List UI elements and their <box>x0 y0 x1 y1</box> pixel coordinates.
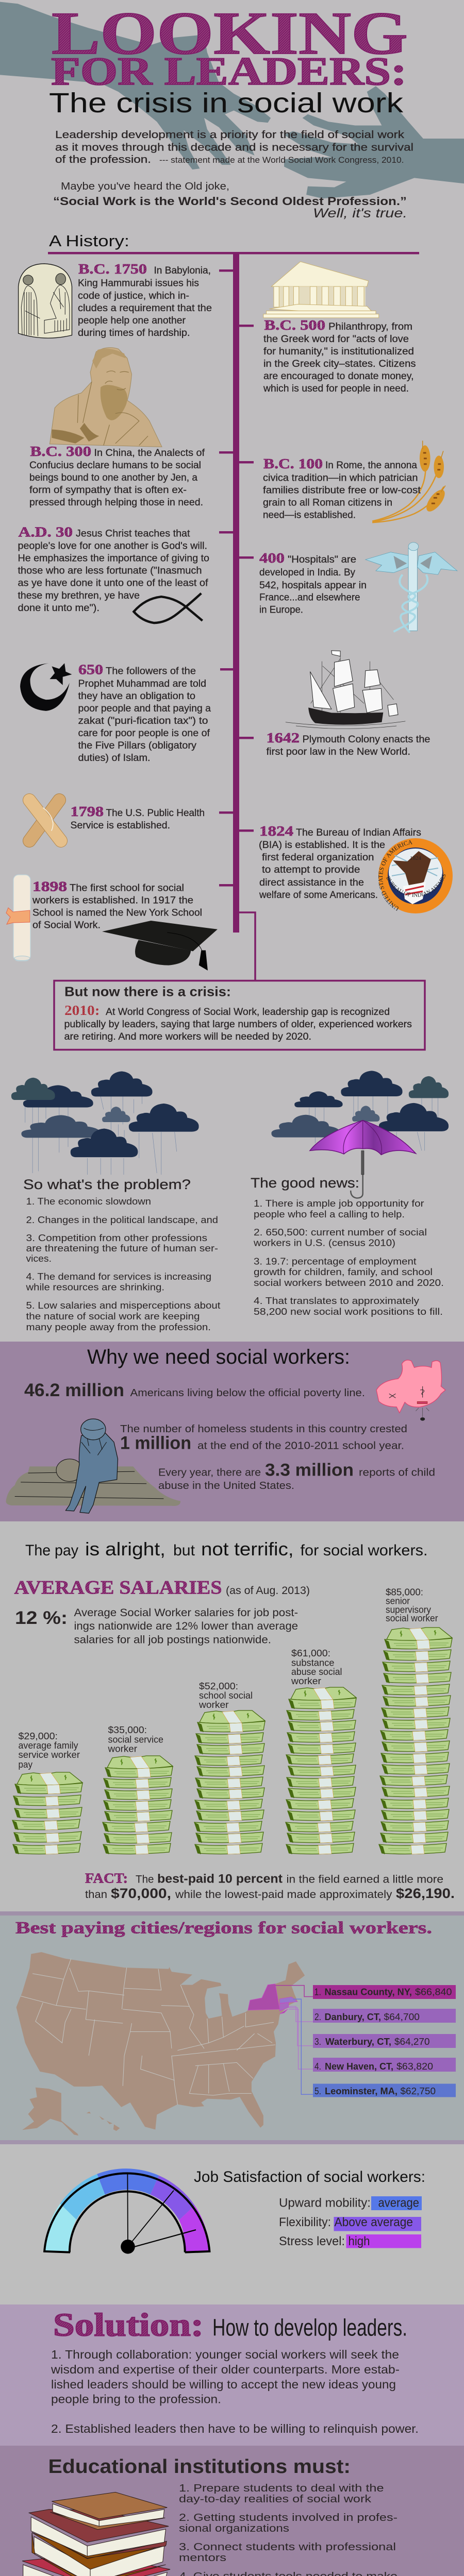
timeline entry: 650: poor people and that paying a <box>78 703 211 714</box>
timeline entry: 1824: welfare of some Americans. <box>259 890 378 901</box>
timeline entry: A.D. 30: A.D. 30 <box>19 524 73 540</box>
text: educational institutions list: 2. Getting students involved in profes- <box>179 2512 397 2523</box>
hands reaching silhouette <box>0 2 464 198</box>
stat: homeless students: at the end of the 2010-2011 school year. <box>197 1440 404 1452</box>
column: The good news: growth for children, family, and school <box>254 1267 433 1277</box>
stat: 46.2 million in poverty: 46.2 million <box>24 1380 124 1400</box>
column: So what's the problem: 4. The demand for services is increasing <box>26 1272 211 1282</box>
heading: solution <box>53 2306 407 2343</box>
timeline entry: 1798: Service is established. <box>70 820 170 831</box>
stat: homeless students: 1 million <box>120 1433 191 1453</box>
timeline entry: 650: they have an obligation to <box>78 691 195 702</box>
timeline entry: B.C. 1750: during times of hardship. <box>78 328 190 338</box>
column: So what's the problem: vices. <box>26 1253 52 1264</box>
heading: best paying cities: Best paying cities/regions for social workers. <box>15 1919 432 1937</box>
timeline entry: A.D. 30: done it unto me"). <box>18 603 100 614</box>
chart: money stack $29,000 <box>12 1772 82 1854</box>
title: The crisis in social work <box>49 88 404 118</box>
chart: salary label $61,000: $61,000: <box>291 1648 330 1658</box>
heading: pay: not terrific, <box>201 1538 294 1560</box>
text: how to develop leaders list: wisdom and expertise of their older counterparts. More estab- <box>51 2363 400 2376</box>
fact: best-paid and lowest-paid: in the field earned a little more <box>287 1873 443 1886</box>
icon: crescent and star <box>20 663 72 711</box>
timeline entry: B.C. 300 <box>29 444 205 508</box>
icon: sailing ship <box>286 651 405 728</box>
chart: salary label $61,000: abuse social <box>291 1667 342 1677</box>
timeline entry: 650 <box>78 662 211 764</box>
legend: flexibility: Flexibility: <box>279 2215 331 2229</box>
timeline entry: 1824: to attempt to provide <box>262 865 360 875</box>
callout: Waterbury: 3. <box>314 2037 321 2047</box>
heading: pay: is alright, <box>85 1538 165 1560</box>
stat: child abuse reports: Every year, there are <box>158 1467 261 1479</box>
timeline entry: 650: the Five Pillars (obligatory <box>78 740 197 751</box>
stat: child abuse reports: 3.3 million <box>265 1460 354 1480</box>
chart: salary label $85,000: $85,000: <box>386 1587 423 1597</box>
column: The good news: people who feel a calling to help. <box>254 1209 405 1219</box>
umbrella handle hook <box>351 1175 363 1198</box>
timeline entry: A.D. 30: those who are less fortunate ("Inasmuch <box>18 566 202 576</box>
stat: homeless students <box>120 1423 407 1453</box>
icon: Bureau of Indian Affairs seal <box>378 838 453 913</box>
timeline entry: 400: "Hospitals" are <box>288 554 356 565</box>
timeline entry: 1824: first federal organization <box>262 852 374 863</box>
timeline entry: B.C. 100 <box>263 456 421 520</box>
timeline entry: 650: 650 <box>78 662 103 677</box>
timeline entry: 1898: School is named the New York School <box>32 908 202 918</box>
chart: salary label $29,000: average family <box>19 1740 78 1751</box>
text: educational institutions list <box>179 2483 397 2576</box>
callout: Danbury: $64,700 <box>384 2012 420 2022</box>
fact: best-paid and lowest-paid: $26,190. <box>396 1886 455 1901</box>
heading: solution: Solution: <box>53 2306 204 2343</box>
chart: salary label $35,000: social service <box>108 1734 163 1744</box>
old joke quote: Well, it's true. <box>313 206 407 221</box>
panel: crisis callout: are retiring. And more workers will be needed by 2020. <box>64 1031 311 1042</box>
text: how to develop leaders list <box>51 2348 419 2435</box>
icon: bandage <box>29 800 61 841</box>
heading: pay <box>25 1538 428 1560</box>
timeline entry: 650: Prophet Muhammad are told <box>78 679 206 689</box>
chart: salary label $29,000: pay <box>19 1759 32 1770</box>
column: So what's the problem: the nature of social work are keeping <box>26 1311 200 1321</box>
intro statement: as it moves through this decade and is necessary for the survival <box>55 142 413 154</box>
column: So what's the problem: 5. Low salaries and misperceptions about <box>26 1300 221 1311</box>
timeline entry: A.D. 30: people's love for one another is God's will. <box>18 541 207 551</box>
text: educational institutions list: sional organizations <box>179 2523 289 2534</box>
timeline entry: B.C. 1750: cludes a requirement that the <box>78 303 212 314</box>
timeline entry: B.C. 300: beings bound to one another by Jen, a <box>29 472 197 483</box>
chart: salary label $35,000 <box>107 1725 163 1754</box>
stat: 12 percent: salaries for all job postings nationwide. <box>74 1634 271 1646</box>
timeline entry: A.D. 30: He emphasizes the importance of giving to <box>18 553 209 564</box>
chart: money stack $52,000 <box>194 1710 265 1854</box>
icon: diploma scroll <box>6 875 30 961</box>
illustration: right rain clouds with umbrella <box>271 1071 449 1175</box>
icon: wheat <box>372 440 449 522</box>
timeline entry: 1798: The U.S. Public Health <box>106 808 205 819</box>
timeline entry: 1898: 1898 <box>32 879 67 894</box>
heading: average salaries: (as of Aug. 2013) <box>226 1585 310 1597</box>
fact: best-paid and lowest-paid <box>85 1870 455 1901</box>
chart: salary label $52,000: $52,000: <box>199 1681 238 1691</box>
chart: salary label $85,000 <box>386 1587 438 1623</box>
intro statement: of the profession. <box>55 154 151 165</box>
column: So what's the problem <box>23 1177 221 1332</box>
fact: best-paid and lowest-paid: while the lowest-paid made approximately <box>175 1889 392 1901</box>
timeline entry: 1824: direct assistance in the <box>259 877 364 888</box>
fact: best-paid and lowest-paid: The <box>136 1873 154 1886</box>
icon: upside-down piggy bank <box>376 1360 445 1421</box>
chart: salary label $61,000: worker <box>291 1676 321 1686</box>
column: The good news: 4. That translates to approximately <box>254 1296 419 1306</box>
timeline entry: B.C. 500: are encouraged to donate money, <box>263 371 413 382</box>
chart: salary label $85,000: social worker <box>386 1613 438 1623</box>
stat: 46.2 million in poverty <box>24 1380 365 1400</box>
callout: Leominster <box>313 2083 456 2097</box>
column: The good news: social workers between 2010 and 2020. <box>254 1278 444 1288</box>
timeline entry: 1824: (BIA) is established. It is the <box>259 840 385 851</box>
column: The good news: 3. 19.7: percentage of employment <box>254 1256 417 1266</box>
column: The good news: workers in U.S. (census 2010) <box>253 1238 395 1248</box>
callout: Waterbury <box>313 2034 456 2048</box>
timeline entry: 1642: 1642 <box>266 730 300 745</box>
column: The good news: The good news: <box>251 1175 359 1191</box>
stat: 12 percent: ings nationwide are 12% lower than average <box>74 1620 298 1632</box>
icon: Bureau of Indian Affairs seal: 1824 <box>410 855 422 861</box>
timeline entry: B.C. 100: civica tradition—in which patrician <box>263 473 418 483</box>
old joke quote: Maybe you've heard the Old joke, <box>61 181 229 192</box>
stat: 12 percent: Average Social Worker salaries for job post- <box>74 1607 298 1619</box>
chart: salary label $52,000 <box>198 1681 253 1710</box>
callout: Nassau County: 1. <box>314 1987 321 1997</box>
timeline entry: 1798: 1798 <box>70 804 104 819</box>
column: The good news <box>251 1175 444 1317</box>
fact: best-paid and lowest-paid: than <box>85 1889 107 1901</box>
timeline entry: B.C. 100: grain to all Roman citizens in <box>263 498 392 508</box>
callout: New Haven: 4. <box>314 2061 321 2072</box>
timeline entry: 1824: The Bureau of Indian Affairs <box>296 827 421 838</box>
callout: Nassau County: Nassau County, NY, <box>325 1987 412 1997</box>
icon: Bureau of Indian Affairs seal: UNITED STATES OF AMERICA <box>378 840 412 911</box>
old joke quote: “Social Work is the World's Second Oldest Profession.” <box>53 195 407 208</box>
text: educational institutions list: mentors <box>179 2552 226 2564</box>
timeline entry: B.C. 500: for humanity," is institutionalized <box>263 346 414 357</box>
chart: money stack $85,000 <box>379 1628 452 1854</box>
callout: Nassau County <box>313 1985 456 1999</box>
timeline entry: A.D. 30: these my brethren, ye have <box>18 590 140 601</box>
callout connector lines <box>275 1986 313 2094</box>
stat: 12 percent: 12 %: <box>15 1608 68 1628</box>
stat: child abuse reports <box>158 1460 435 1492</box>
timeline entry: B.C. 500: which is used for people in need. <box>263 383 409 394</box>
legend: stress level: Stress level: <box>279 2234 345 2248</box>
timeline entry: B.C. 1750: King Hammurabi issues his <box>78 278 199 289</box>
chart: US map <box>16 1952 305 2136</box>
intro statement: Leadership development is a priority for the field of social work <box>55 129 405 141</box>
icon: stack of books <box>19 2492 170 2576</box>
intro statement: --- statement made at the World Social Work Congress, 2010. <box>159 155 404 165</box>
chart: salary label $61,000 <box>291 1648 342 1686</box>
timeline entry: B.C. 500: the Greek word for "acts of love <box>263 334 409 345</box>
timeline entry: B.C. 1750: B.C. 1750 <box>78 261 147 277</box>
heading: A History: A History: <box>49 232 129 250</box>
timeline entry: 400: France...and elsewhere <box>259 592 360 603</box>
icon: Greek temple <box>263 262 379 318</box>
chart: salary label $29,000: $29,000: <box>19 1731 58 1741</box>
heading: job satisfaction: Job Satisfaction of social workers: <box>194 2168 425 2185</box>
column: The good news: 58,200 new social work positions to fill. <box>254 1307 443 1317</box>
timeline entry: 400 <box>259 550 367 615</box>
chart: salary label $52,000: school social <box>199 1690 253 1701</box>
column: So what's the problem: many people away from the profession. <box>26 1322 211 1332</box>
heading: pay: for social workers. <box>300 1542 428 1559</box>
callout: Leominster: 5. <box>314 2086 321 2096</box>
title: FOR LEADERS: <box>51 49 407 93</box>
callout: Danbury: 2. <box>314 2012 321 2022</box>
timeline entry: B.C. 500: B.C. 500 <box>264 317 325 333</box>
timeline entry: B.C. 1750 <box>78 261 212 338</box>
timeline entry: B.C. 500: Philanthropy, from <box>328 321 412 332</box>
timeline entry: B.C. 500: in the Greek city–states. Citizens <box>263 359 416 369</box>
timeline entry: B.C. 100: need—is established. <box>263 510 356 520</box>
callout: New Haven: New Haven, CT, <box>325 2061 393 2072</box>
legend: upward mobility <box>279 2196 422 2210</box>
heading: pay: The pay <box>25 1542 78 1559</box>
timeline entry: 1824: 1824 <box>259 823 293 839</box>
timeline entry: B.C. 300: In China, the Analects of <box>94 448 205 459</box>
chart: salary label $35,000: worker <box>107 1743 137 1754</box>
column: The good news: 1. There is ample job opportunity for <box>254 1198 424 1209</box>
callout: New Haven <box>313 2058 456 2072</box>
callout: Leominster: Leominster, MA, <box>325 2086 397 2096</box>
timeline entry: 650: duties) of Islam. <box>78 753 151 764</box>
timeline entry: B.C. 300: B.C. 300 <box>30 444 91 459</box>
chart: salary label $85,000: supervisory <box>386 1604 431 1615</box>
chart: salary label $35,000: $35,000: <box>108 1725 147 1735</box>
legend: flexibility <box>279 2215 421 2231</box>
stat: child abuse reports: abuse in the United States. <box>158 1480 294 1492</box>
timeline entry: 1824 <box>259 823 421 901</box>
timeline entry: B.C. 1750: In Babylonia, <box>154 265 211 276</box>
chart: salary label $85,000: senior <box>386 1596 410 1606</box>
callout: New Haven: $63,820 <box>396 2061 433 2072</box>
stat: 46.2 million in poverty: Americans living below the official poverty line. <box>130 1387 365 1399</box>
chart: money stack $35,000 <box>103 1756 173 1854</box>
legend: upward mobility: average <box>378 2196 419 2210</box>
timeline entry: 400: 542, hospitals appear in <box>259 580 367 591</box>
legend: flexibility: Above average <box>334 2215 413 2229</box>
fact: best-paid and lowest-paid: $70,000, <box>111 1886 171 1901</box>
heading: educational institutions: Educational institutions must: <box>48 2456 351 2478</box>
panel: crisis callout: At World Congress of Social Work, leadership gap is recognized <box>106 1007 390 1018</box>
timeline entry: 1642: Plymouth Colony enacts the <box>302 734 430 745</box>
timeline entry: 1898: The first school for social <box>70 883 184 893</box>
heading: pay: but <box>173 1542 195 1559</box>
title <box>49 0 408 118</box>
timeline entry: A.D. 30: as ye have done it unto one of the least of <box>18 578 208 588</box>
timeline entry: 650: zakat ("puri-fication tax") to <box>78 716 208 726</box>
icon: caduceus <box>366 543 457 633</box>
timeline entry: 650: The followers of the <box>106 666 196 677</box>
title: LOOKING <box>52 0 408 67</box>
timeline entry: 400: in Europe. <box>259 605 303 615</box>
callout: Waterbury: $64,270 <box>394 2037 430 2047</box>
column: So what's the problem: while resources are shrinking. <box>25 1282 164 1292</box>
chart: job satisfaction gauge <box>44 2168 209 2254</box>
chart: salary label $61,000: substance <box>291 1658 334 1668</box>
panel: crisis callout <box>54 981 425 1050</box>
fact: best-paid and lowest-paid: best-paid 10 percent <box>157 1872 283 1886</box>
timeline entry: B.C. 500 <box>263 317 416 394</box>
text: how to develop leaders list: lished leaders should be willing to accept the new ideas young <box>51 2378 396 2391</box>
icon: Confucius bust <box>49 348 162 447</box>
stat: child abuse reports: reports of child <box>359 1467 435 1479</box>
intro statement <box>55 129 413 165</box>
timeline entry: B.C. 1750: code of justice, which in- <box>78 291 189 301</box>
timeline entry: A.D. 30: Jesus Christ teaches that <box>76 529 190 539</box>
icon: Bureau of Indian Affairs seal: BUREAU OF INDIAN AFFAIRS <box>386 874 445 897</box>
timeline axis <box>48 252 419 980</box>
chart: salary label $29,000: service worker <box>19 1750 80 1760</box>
icon: ichthys fish <box>134 594 203 623</box>
callout: Waterbury: Waterbury, CT, <box>325 2037 391 2047</box>
timeline entry: B.C. 300: Confucius declare humans to be social <box>29 460 201 471</box>
illustration: left rain clouds <box>11 1071 199 1175</box>
text: educational institutions list: 3. Connect students with professional <box>179 2541 396 2553</box>
chart: salary label $29,000 <box>19 1731 80 1770</box>
timeline entry: 650: care for poor people is one of <box>78 728 210 739</box>
stat: homeless students: The number of homeless students in this country crested <box>120 1423 407 1435</box>
panel: crisis callout: But now there is a crisis: <box>64 984 231 999</box>
timeline entry: 400: 400 <box>259 550 285 566</box>
timeline entry: 1642 <box>266 730 430 757</box>
panel: crisis callout: 2010: <box>64 1003 100 1018</box>
text: how to develop leaders list: 1. Through collaboration: younger social workers will seek the <box>51 2348 399 2361</box>
text: educational institutions list: day-to-day realities of social work <box>179 2494 372 2505</box>
old joke quote <box>53 181 407 221</box>
timeline entry: 1898: workers is established. In 1917 the <box>32 895 193 906</box>
timeline entry: 1898: of Social Work. <box>32 920 101 930</box>
icon: Hammurabi stele <box>19 264 72 338</box>
column: So what's the problem: 2. Changes in the political landscape, and <box>26 1215 218 1225</box>
timeline entry: B.C. 300: form of sympathy that is often ex- <box>29 485 187 496</box>
heading: average salaries: AVERAGE SALARIES <box>14 1578 222 1598</box>
illustration: homeless child on steps <box>6 1419 180 1513</box>
panel: crisis callout: publically by leaders, saying that large numbers of older, experienced workers <box>64 1019 412 1030</box>
column: So what's the problem: 3. Competition from other professions <box>26 1233 207 1243</box>
timeline entry: B.C. 100: In Rome, the annona <box>325 460 417 471</box>
timeline entry: B.C. 100: B.C. 100 <box>263 456 323 471</box>
timeline entry: 1898 <box>32 879 202 930</box>
timeline entry: B.C. 100: families distribute free or low-cost <box>263 485 421 496</box>
timeline entry: 400: developed in India. By <box>259 567 355 578</box>
heading: Why we need social workers: Why we need social workers: <box>87 1346 350 1368</box>
column: So what's the problem: 1. The economic slowdown <box>26 1196 151 1207</box>
chart: salary label $52,000: worker <box>198 1700 229 1710</box>
heading: solution: How to develop leaders. <box>212 2314 407 2341</box>
column: So what's the problem: So what's the problem? <box>23 1177 191 1192</box>
callout: Danbury: Danbury, CT, <box>325 2012 381 2022</box>
timeline entry: A.D. 30 <box>18 524 209 614</box>
stat: 12 percent <box>15 1607 298 1646</box>
column: So what's the problem: are threatening the future of human ser- <box>26 1243 218 1253</box>
callout: Leominster: $62,750 <box>400 2086 436 2096</box>
legend: stress level: high <box>349 2234 370 2248</box>
timeline entry: B.C. 300: pressed through helping those in need. <box>29 497 203 508</box>
text: how to develop leaders list: people bring to the profession. <box>51 2393 221 2406</box>
fact: best-paid and lowest-paid: FACT: <box>85 1870 128 1886</box>
icon: graduation cap <box>102 921 218 971</box>
callout: Danbury <box>313 2009 456 2023</box>
column: The good news: 2. 650,500: current number of social <box>254 1227 427 1238</box>
text: how to develop leaders list: 2. Established leaders then have to be willing to relinquish power. <box>51 2422 419 2435</box>
text: educational institutions list: 1. Prepare students to deal with the <box>179 2483 384 2494</box>
chart: money stack $61,000 <box>286 1687 356 1854</box>
callout: Nassau County: $66,840 <box>415 1987 452 1997</box>
timeline entry: B.C. 1750: people help one another <box>78 315 186 326</box>
timeline entry: 1642: first poor law in the New World. <box>266 747 410 757</box>
timeline entry: 1798 <box>70 804 205 831</box>
legend: upward mobility: Upward mobility: <box>279 2196 371 2210</box>
legend: stress level <box>279 2234 421 2248</box>
heading: average salaries <box>14 1578 310 1598</box>
